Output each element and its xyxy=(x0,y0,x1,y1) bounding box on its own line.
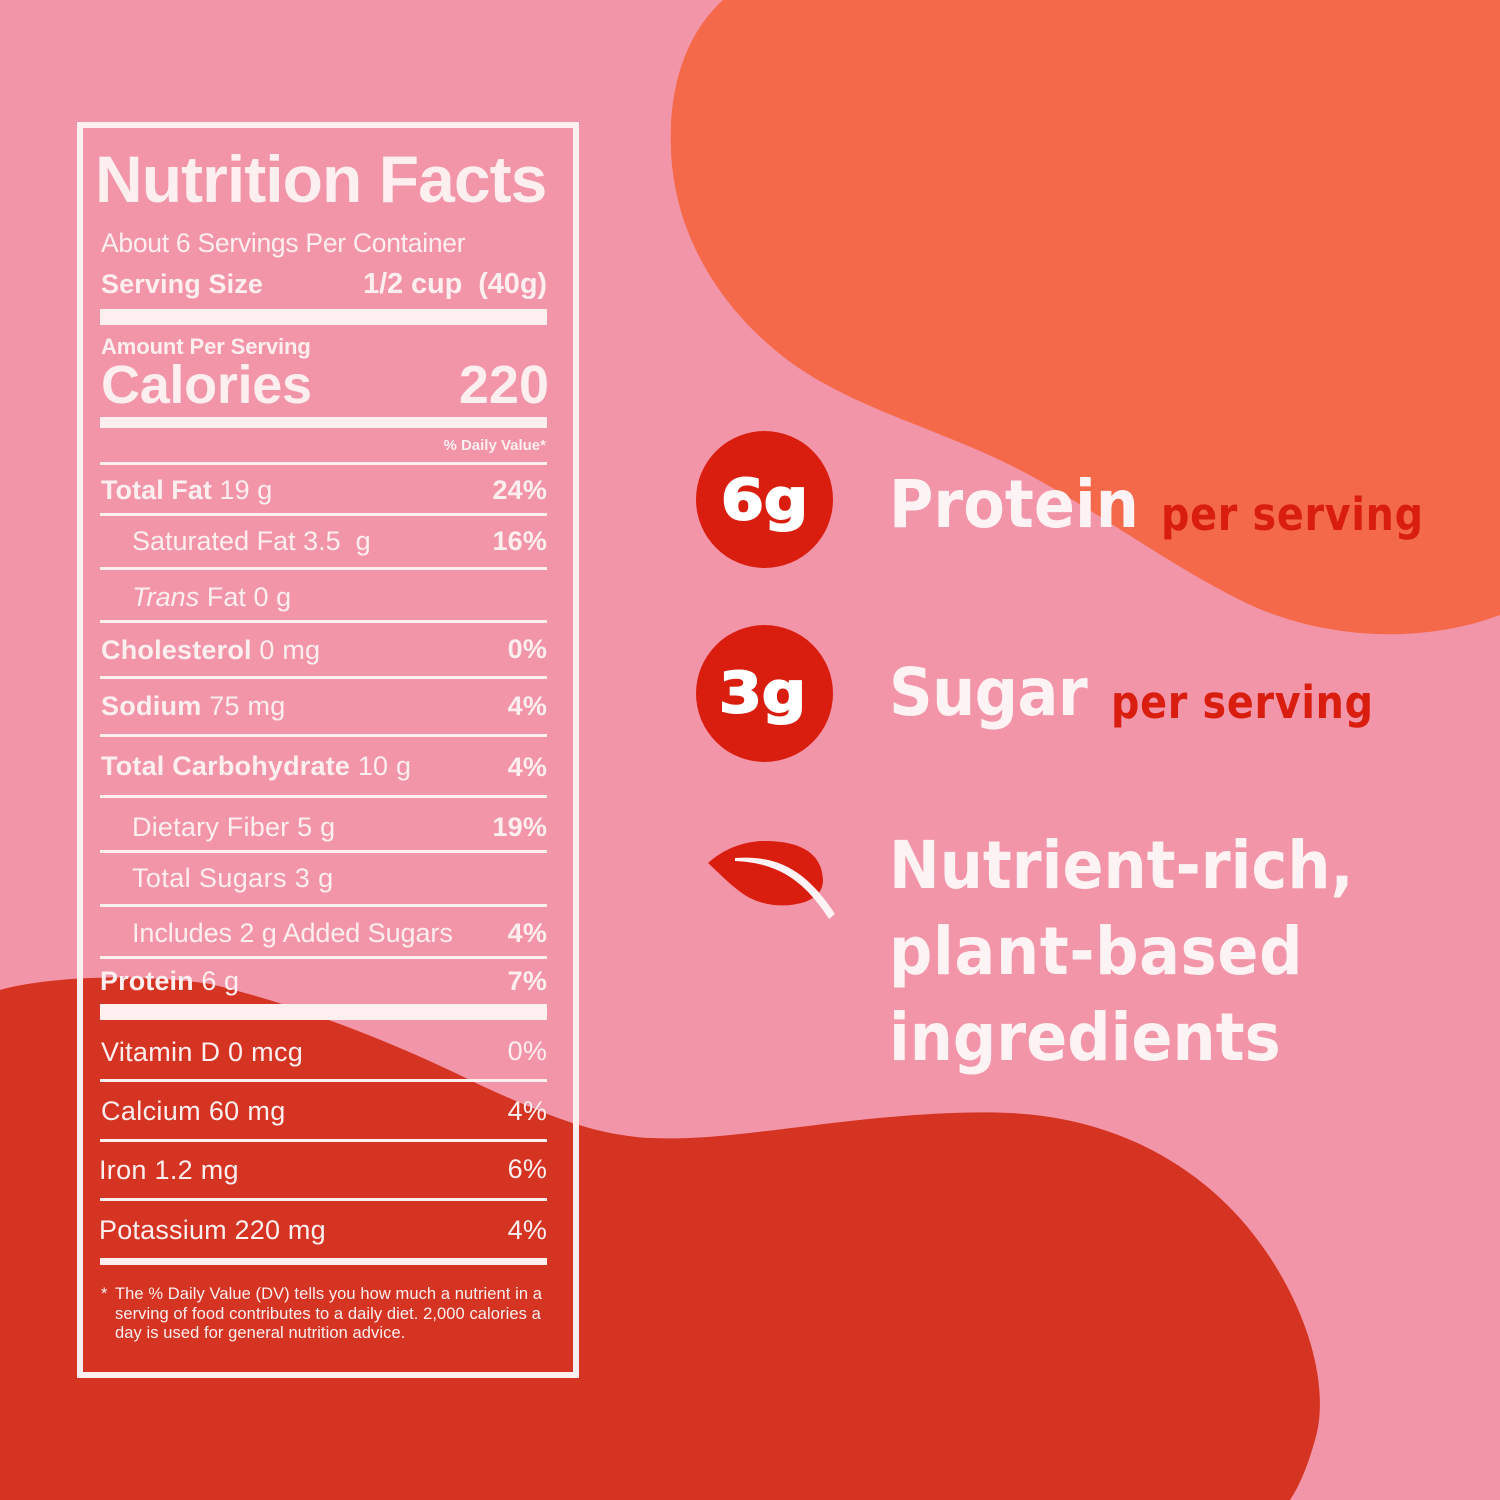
amount per serving: Amount Per Serving xyxy=(101,334,311,359)
row: trans fat: Trans Fat 0 g xyxy=(132,582,291,612)
row: calcium xyxy=(101,1096,547,1126)
row: vitamin d: Vitamin D 0 mcg xyxy=(101,1037,303,1067)
serving size row xyxy=(101,268,547,300)
servings per container: About 6 Servings Per Container xyxy=(101,228,465,258)
icon: 6g badge: 6g xyxy=(721,468,808,533)
row: total fat: 24% xyxy=(492,475,547,505)
row: protein: Protein 6 g xyxy=(100,966,239,996)
row: vitamin d xyxy=(101,1036,547,1067)
row: total carbohydrate: Total Carbohydrate 10 g xyxy=(101,751,411,781)
row: added sugars: 4% xyxy=(508,918,547,948)
footnote xyxy=(101,1285,542,1342)
row: added sugars: Includes 2 g Added Sugars xyxy=(132,918,453,948)
serving size row: Serving Size xyxy=(101,269,263,299)
panel: nutrition facts label xyxy=(77,122,579,1378)
footnote: The % Daily Value (DV) tells you how much a nutrient in a xyxy=(115,1285,542,1303)
row: sodium xyxy=(101,691,547,721)
row: total fat: Total Fat 19 g xyxy=(101,475,272,505)
row: sodium: 4% xyxy=(508,691,547,721)
sugar heading: Sugar xyxy=(889,654,1087,731)
row: saturated fat xyxy=(132,526,547,556)
row: dietary fiber xyxy=(132,812,547,842)
row: total fat xyxy=(101,475,547,505)
sugar heading xyxy=(889,654,1374,731)
row: dietary fiber: 19% xyxy=(492,812,547,842)
calories row xyxy=(101,355,549,415)
row: iron: 6% xyxy=(508,1154,547,1184)
row: saturated fat: 16% xyxy=(492,526,547,556)
sugar heading: per serving xyxy=(1111,676,1374,729)
title: Nutrition Facts xyxy=(95,142,546,216)
serving size row: 1/2 cup (40g) xyxy=(363,268,547,300)
row: saturated fat: Saturated Fat 3.5 g xyxy=(132,526,371,556)
footnote: day is used for general nutrition advice. xyxy=(115,1324,405,1342)
footnote: serving of food contributes to a daily diet. 2,000 calories a xyxy=(115,1304,541,1322)
row: cholesterol xyxy=(101,634,547,665)
protein heading: per serving xyxy=(1161,488,1424,541)
row: calcium: Calcium 60 mg xyxy=(101,1096,286,1126)
row: potassium: 4% xyxy=(508,1215,547,1245)
protein heading xyxy=(889,466,1424,543)
plant-based heading: Nutrient-rich, xyxy=(889,827,1354,904)
protein heading: Protein xyxy=(889,466,1139,543)
row: iron xyxy=(99,1154,547,1185)
row: total carbohydrate xyxy=(101,751,547,782)
row: sodium: Sodium 75 mg xyxy=(101,691,286,721)
row: protein xyxy=(100,966,547,996)
row: iron: Iron 1.2 mg xyxy=(99,1155,239,1185)
calories row: 220 xyxy=(459,355,549,415)
row: cholesterol: Cholesterol 0 mg xyxy=(101,635,320,665)
row: cholesterol: 0% xyxy=(508,634,547,664)
icon: 6g badge xyxy=(696,431,833,568)
row: total sugars: Total Sugars 3 g xyxy=(132,863,334,893)
icon: 3g badge: 3g xyxy=(719,661,806,726)
row: total carbohydrate: 4% xyxy=(508,752,547,782)
footnote: * xyxy=(101,1285,108,1303)
plant-based heading xyxy=(889,827,1354,1076)
plant-based heading: plant-based xyxy=(889,913,1303,990)
icon: 3g badge xyxy=(696,625,833,762)
row: dietary fiber: Dietary Fiber 5 g xyxy=(132,812,335,842)
row: potassium xyxy=(99,1215,547,1245)
row: vitamin d: 0% xyxy=(508,1036,547,1066)
row: calcium: 4% xyxy=(508,1096,547,1126)
row: potassium: Potassium 220 mg xyxy=(99,1215,326,1245)
daily value header: % Daily Value* xyxy=(443,437,546,454)
icon: leaf xyxy=(708,841,835,919)
calories row: Calories xyxy=(101,355,312,415)
plant-based heading: ingredients xyxy=(889,999,1281,1076)
row: protein: 7% xyxy=(508,966,547,996)
